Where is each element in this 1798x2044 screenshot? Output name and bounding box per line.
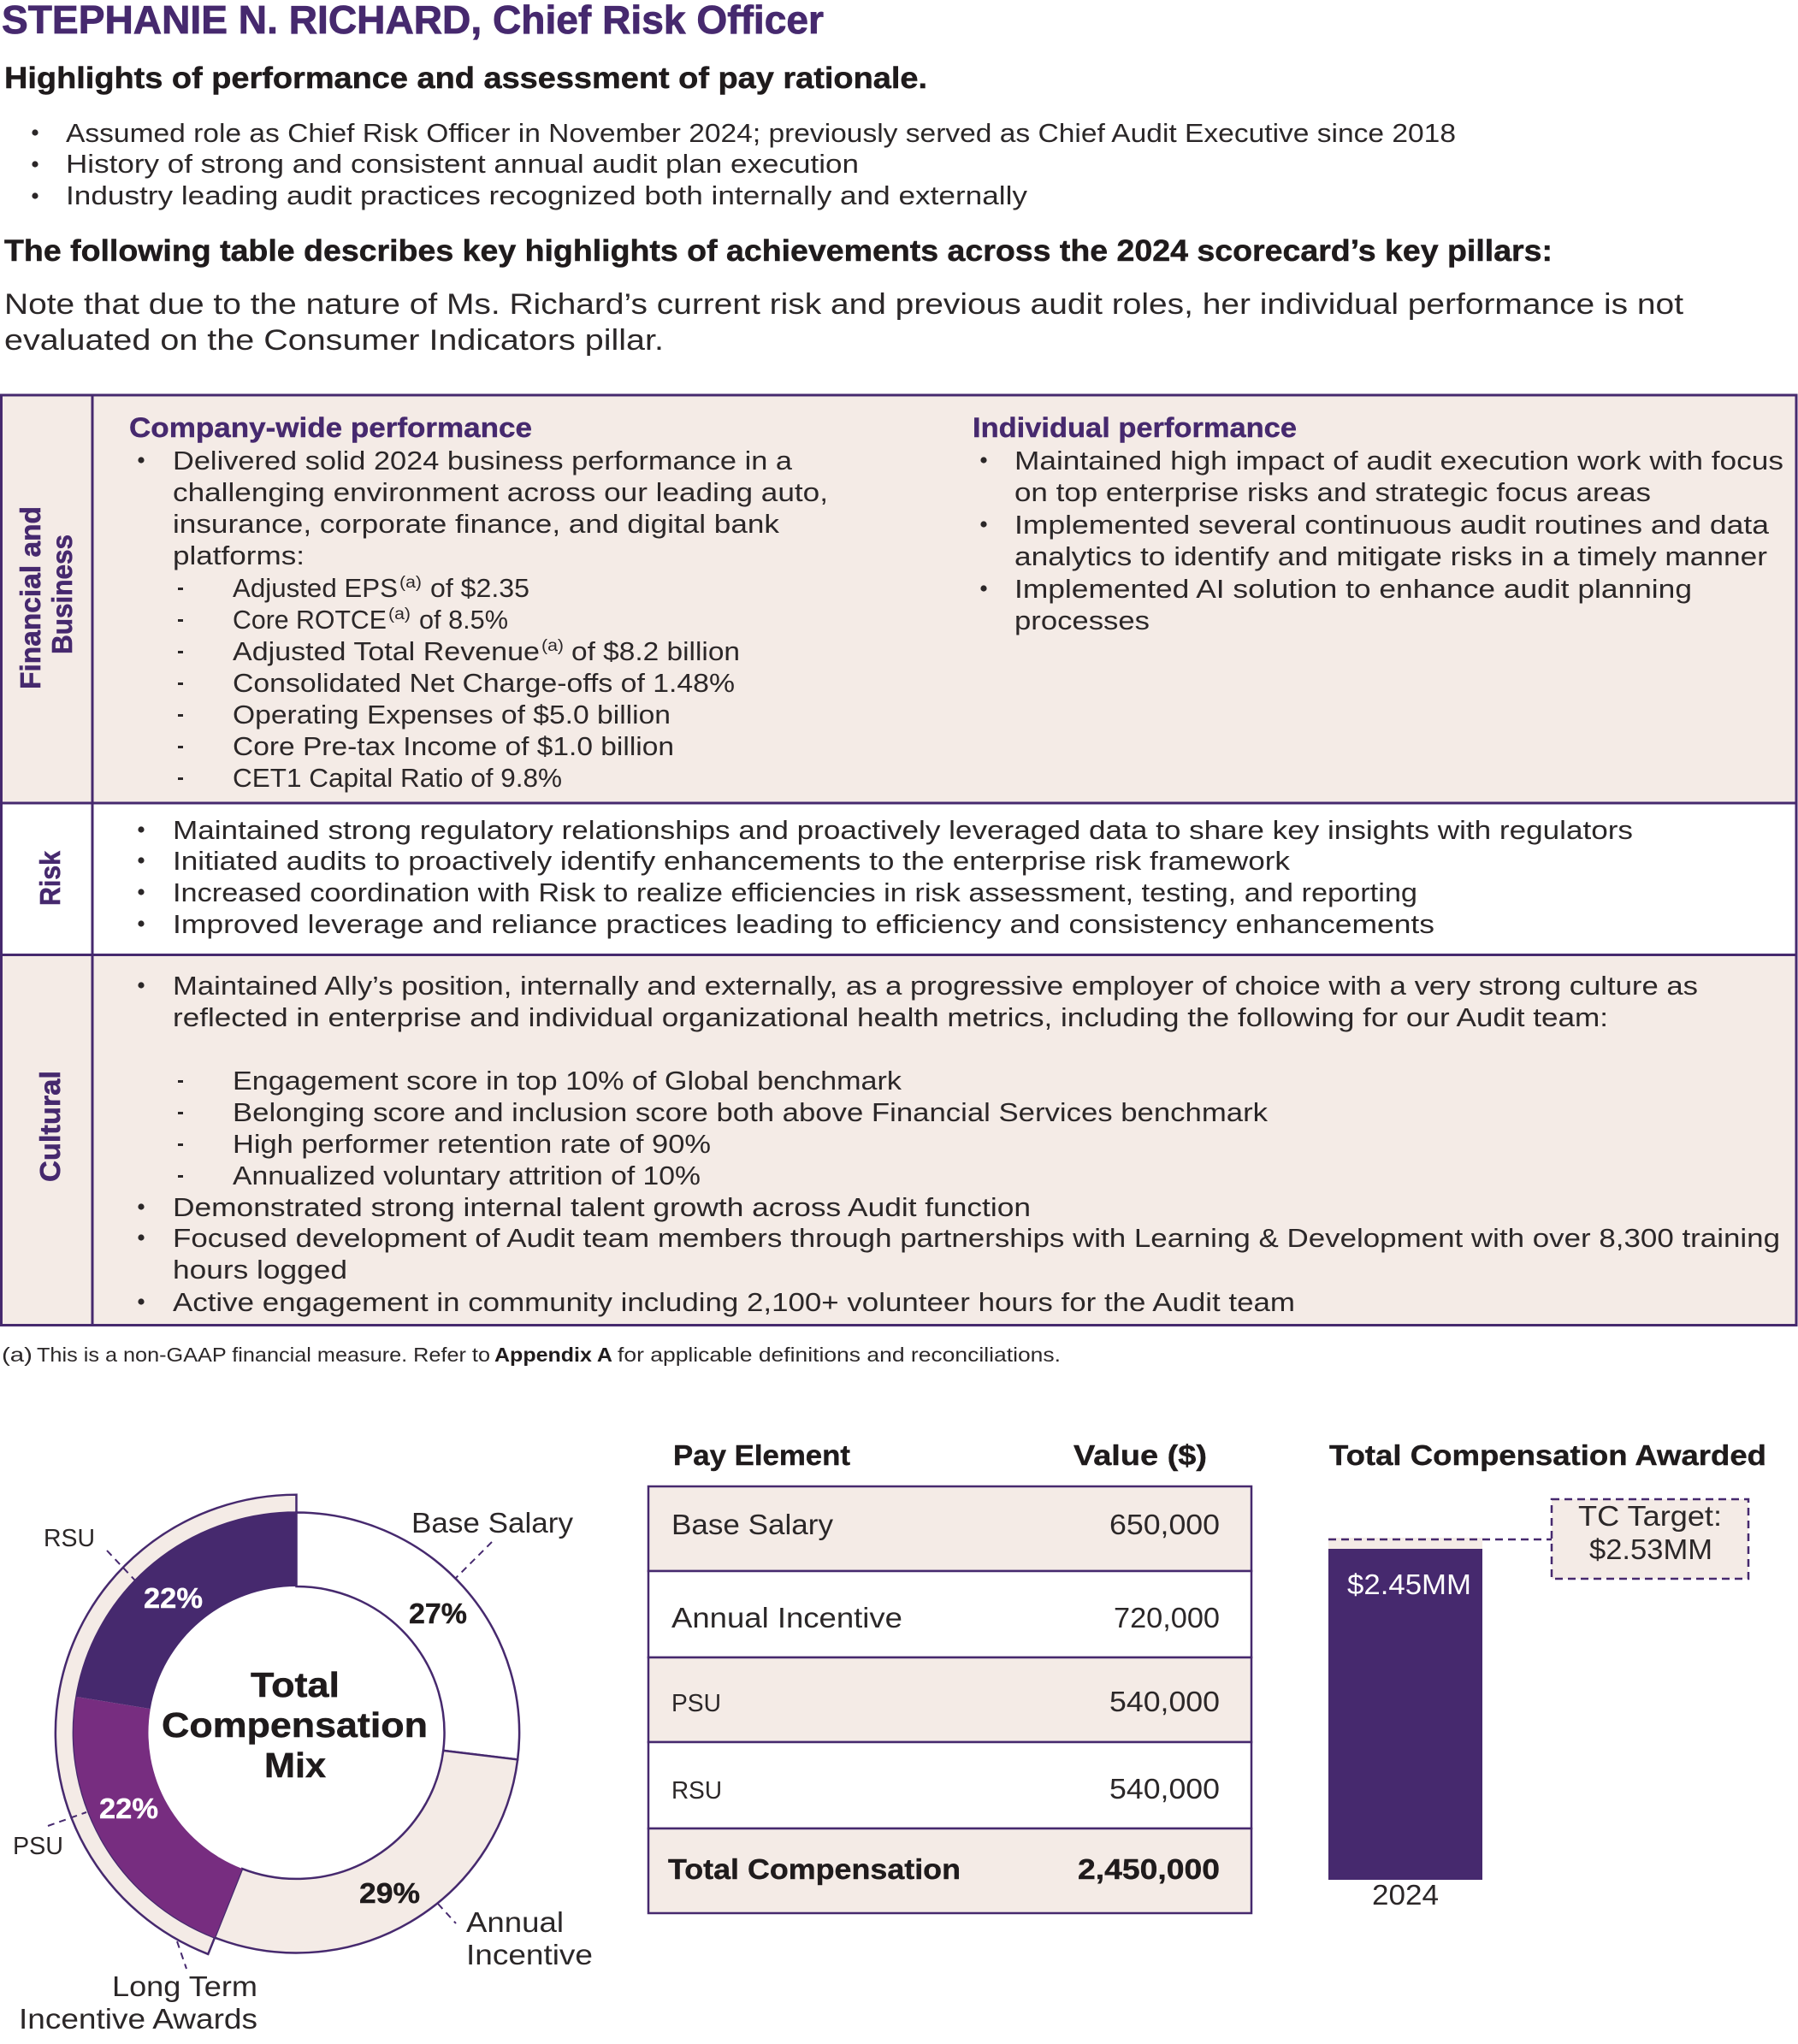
- leader lines: [48, 1542, 492, 1969]
- company-wide performance column: challenging environment across our leading auto,: [173, 477, 828, 507]
- row label: financial and business: [15, 506, 78, 689]
- row: total compensation: Total Compensation: [668, 1853, 961, 1885]
- row: annual incentive: 720,000: [1114, 1602, 1220, 1633]
- company-wide performance column: Adjusted Total Revenue: [233, 636, 540, 666]
- company-wide performance column: Delivered solid 2024 business performance in a: [173, 446, 793, 476]
- segment: rsu: [76, 1513, 297, 1709]
- category labels: Base Salary: [411, 1507, 574, 1539]
- category labels: PSU: [13, 1833, 63, 1860]
- cultural bullet list: [138, 971, 1780, 1317]
- risk bullet list: Maintained strong regulatory relationships and proactively leveraged data to share key insights with regulators: [173, 815, 1633, 845]
- row label: financial and business: Financial and: [15, 506, 46, 689]
- bullet list: role summary: Industry leading audit practices recognized both internally and externally: [66, 180, 1028, 210]
- row: total compensation: 2,450,000: [1078, 1853, 1220, 1885]
- company-wide performance column: [129, 412, 828, 793]
- center label: Compensation: [162, 1705, 428, 1745]
- category labels: Incentive: [466, 1939, 593, 1970]
- individual performance column: Implemented several continuous audit routines and data: [1014, 510, 1770, 540]
- bar value: $2.45MM: [1347, 1568, 1471, 1600]
- company-wide performance column: Consolidated Net Charge-offs of 1.48%: [233, 668, 735, 698]
- bar chart: total compensation awarded: [1328, 1439, 1766, 1911]
- percent labels: 27%: [409, 1598, 467, 1629]
- category labels: Annual: [466, 1906, 564, 1938]
- bullet list: role summary: Assumed role as Chief Risk Officer in November 2024; previously served as Chief Audit Executive since 2018: [66, 118, 1456, 148]
- pay table: [648, 1439, 1251, 1913]
- row: base salary: Base Salary: [671, 1509, 834, 1540]
- company-wide performance column: Adjusted EPS: [233, 573, 398, 603]
- bullet list: role summary: [32, 118, 1456, 210]
- table header: Pay Element: [673, 1439, 850, 1471]
- row: psu: 540,000: [1109, 1686, 1220, 1717]
- row: psu: PSU: [671, 1690, 721, 1717]
- footnote: Appendix A: [494, 1344, 612, 1366]
- individual performance column: Individual performance: [973, 412, 1297, 443]
- callout: tc target: TC Target:: [1578, 1500, 1722, 1532]
- cultural bullet list: Demonstrated strong internal talent growth across Audit function: [173, 1192, 1031, 1222]
- company-wide performance column: (a): [541, 637, 564, 655]
- panel: financial and business: [2, 395, 1796, 803]
- cultural bullet list: Focused development of Audit team members through partnerships with Learning & Development with over 8,300 training: [173, 1223, 1780, 1253]
- panel: cultural: [2, 954, 1796, 1326]
- row: base salary: [648, 1486, 1251, 1571]
- row label: cultural: Cultural: [34, 1071, 66, 1182]
- footnote: [2, 1344, 1061, 1366]
- percent labels: [99, 1582, 467, 1909]
- individual performance column: processes: [1014, 606, 1150, 635]
- donut ring segments: [56, 1495, 519, 1954]
- company-wide performance column: Company-wide performance: [129, 412, 532, 443]
- percent labels: 22%: [99, 1793, 158, 1824]
- cultural bullet list: hours logged: [173, 1255, 347, 1285]
- company-wide performance column: (a): [399, 574, 422, 592]
- company-wide performance column: Operating Expenses of $5.0 billion: [233, 700, 671, 730]
- risk bullet list: Improved leverage and reliance practices leading to efficiency and consistency enhancements: [173, 909, 1434, 939]
- subheading: table intro: The following table describes key highlights of achievements across the 2024 scorecard’s key pillars:: [4, 234, 1553, 268]
- individual performance column: analytics to identify and mitigate risks in a timely manner: [1014, 541, 1767, 571]
- table header: [673, 1439, 1207, 1471]
- bullet list: role summary: History of strong and consistent annual audit plan execution: [66, 149, 859, 179]
- center label: [162, 1665, 428, 1785]
- risk bullet list: [138, 815, 1633, 939]
- row label: financial and business: Business: [46, 535, 78, 654]
- company-wide performance column: Core ROTCE: [233, 605, 387, 635]
- company-wide performance column: of $8.2 billion: [571, 636, 740, 666]
- category labels: Long Term: [112, 1970, 257, 2002]
- cultural bullet list: Annualized voluntary attrition of 10%: [233, 1161, 701, 1190]
- cultural bullet list: High performer retention rate of 90%: [233, 1129, 711, 1159]
- category labels: Incentive Awards: [19, 2003, 257, 2035]
- footnote: This is a non-GAAP financial measure. Refer to: [37, 1344, 490, 1366]
- individual performance column: Maintained high impact of audit execution work with focus: [1014, 446, 1783, 476]
- center label: Total: [251, 1665, 340, 1704]
- individual performance column: on top enterprise risks and strategic focus areas: [1014, 477, 1651, 507]
- percent labels: 29%: [359, 1877, 420, 1909]
- note text: evaluated on the Consumer Indicators pillar.: [4, 324, 664, 357]
- company-wide performance column: of $2.35: [430, 573, 529, 603]
- callout: tc target: [1552, 1499, 1748, 1579]
- axis label: 2024: [1372, 1879, 1439, 1911]
- cultural bullet list: reflected in enterprise and individual organizational health metrics, including the following for our Audit team:: [173, 1002, 1608, 1032]
- table header: Value ($): [1073, 1439, 1207, 1471]
- note text: Note that due to the nature of Ms. Richard’s current risk and previous audit roles, her individual performance is not: [4, 288, 1684, 321]
- cultural bullet list: Belonging score and inclusion score both above Financial Services benchmark: [233, 1097, 1269, 1127]
- row: psu: [648, 1657, 1251, 1742]
- risk bullet list: Increased coordination with Risk to realize efficiencies in risk assessment, testing, and reporting: [173, 877, 1417, 907]
- segment: long term incentive awards band: [56, 1495, 296, 1954]
- segment: annual incentive: [215, 1751, 518, 1952]
- category labels: [13, 1507, 593, 2035]
- row: annual incentive: [648, 1571, 1251, 1657]
- risk bullet list: Initiated audits to proactively identify enhancements to the enterprise risk framework: [173, 846, 1291, 876]
- company-wide performance column: insurance, corporate finance, and digital bank: [173, 509, 780, 539]
- subheading: highlights: Highlights of performance and assessment of pay rationale.: [4, 62, 927, 95]
- row: base salary: 650,000: [1109, 1509, 1220, 1540]
- row: annual incentive: Annual Incentive: [671, 1602, 902, 1633]
- individual performance column: Implemented AI solution to enhance audit planning: [1014, 574, 1692, 604]
- row: rsu: RSU: [671, 1777, 722, 1805]
- category labels: RSU: [44, 1525, 95, 1552]
- row: total compensation: [648, 1828, 1251, 1913]
- company-wide performance column: platforms:: [173, 541, 305, 570]
- center label: Mix: [264, 1746, 326, 1785]
- row: rsu: 540,000: [1109, 1773, 1220, 1805]
- target band: [1328, 1538, 1482, 1549]
- company-wide performance column: Core Pre-tax Income of $1.0 billion: [233, 731, 674, 761]
- company-wide performance column: of 8.5%: [419, 605, 508, 635]
- company-wide performance column: CET1 Capital Ratio of 9.8%: [233, 763, 562, 793]
- individual performance column: [973, 412, 1783, 635]
- donut chart: total compensation mix: [13, 1495, 593, 2035]
- percent labels: 22%: [144, 1582, 203, 1614]
- chart heading: Total Compensation Awarded: [1329, 1439, 1766, 1471]
- panel: risk: [2, 803, 1796, 954]
- bar: 2024: [1328, 1549, 1482, 1880]
- note text: [4, 288, 1684, 357]
- cultural bullet list: Active engagement in community including 2,100+ volunteer hours for the Audit team: [173, 1287, 1295, 1317]
- segment: psu: [74, 1697, 242, 1938]
- footnote: for applicable definitions and reconciliations.: [618, 1344, 1061, 1366]
- cultural bullet list: Maintained Ally’s position, internally and externally, as a progressive employer of choice with a very strong culture as: [173, 971, 1698, 1001]
- segment: base salary: [296, 1513, 519, 1759]
- footnote: (a): [2, 1344, 33, 1366]
- row: rsu: [648, 1742, 1251, 1828]
- cultural bullet list: Engagement score in top 10% of Global benchmark: [233, 1066, 902, 1096]
- target dashed line: [1328, 1539, 1552, 1540]
- company-wide performance column: (a): [388, 606, 411, 623]
- row label: risk: Risk: [34, 850, 66, 906]
- callout: tc target: $2.53MM: [1589, 1533, 1712, 1565]
